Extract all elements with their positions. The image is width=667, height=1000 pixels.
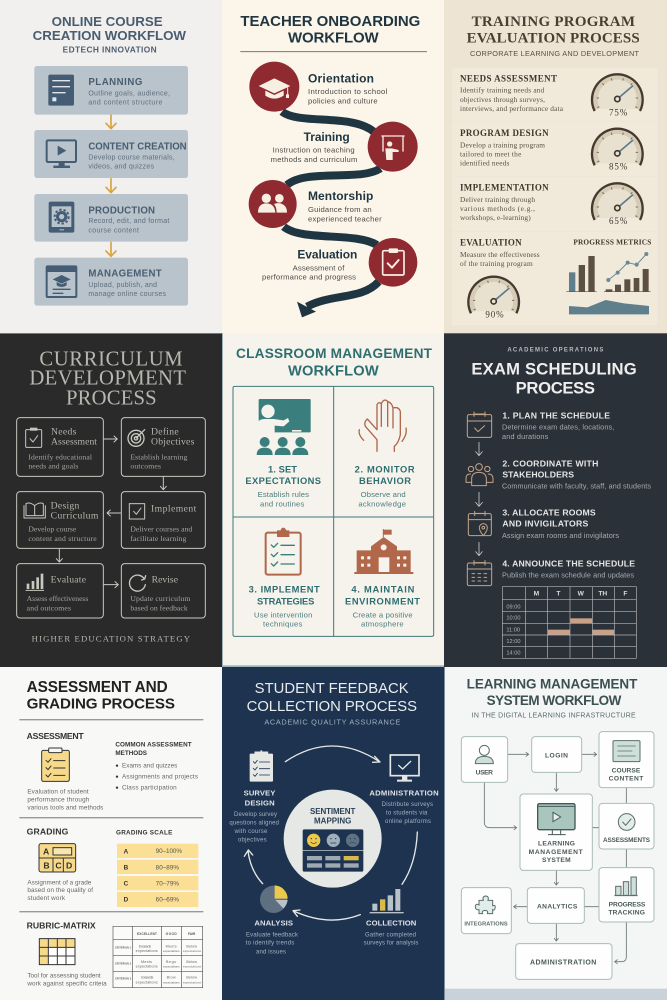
row: evaluation: [452, 232, 657, 325]
common assessment methods: METHODS: [115, 750, 147, 757]
box: design curriculum: Design: [51, 500, 80, 511]
title: training program evaluation process: [467, 14, 640, 46]
rubric table: CRITERION 3: [115, 979, 132, 981]
step: survey design: DESIGN: [245, 799, 275, 808]
step: training: Instruction on teaching: [273, 146, 355, 155]
step: analysis: to identify trends: [246, 941, 294, 947]
title: teacher onboarding workflow: WORKFLOW: [288, 30, 380, 47]
box: evaluate: [17, 564, 103, 618]
step: collection: Gather completed: [365, 932, 416, 938]
section: grading: GRADING: [27, 827, 69, 837]
section: grading: D: [66, 860, 72, 870]
rubric table: CRITERION 1: [115, 947, 132, 949]
quadrant: implement strategies: techniques: [263, 620, 303, 629]
step: planning: Outline goals, audience,: [88, 90, 170, 97]
quadrant: monitor behavior: BEHAVIOR: [359, 476, 411, 486]
exam timetable: T: [556, 591, 560, 598]
rubric table: expectations: [163, 965, 180, 969]
title: training program evaluation process: EVALUATION PROCESS: [467, 30, 640, 46]
step: planning: [34, 66, 188, 115]
step: orientation: [249, 62, 388, 112]
node: learning management system: LEARNING: [538, 841, 575, 848]
box: define objectives: Establish learning: [130, 453, 188, 462]
title: student feedback collection process: [247, 681, 417, 715]
step: content creation: CONTENT CREATION: [88, 141, 187, 152]
footer label: HIGHER EDUCATION STRATEGY: [32, 634, 191, 644]
step: survey design: Develop survey: [234, 812, 277, 818]
rubric table: Blow: [167, 976, 176, 980]
step: evaluation: [262, 238, 417, 287]
step: orientation: Orientation: [308, 72, 374, 86]
step: administration: ADMINISTRATION: [369, 789, 439, 798]
step: planning: PLANNING: [88, 77, 142, 88]
arrow: [476, 542, 482, 556]
rubric table: Meets: [141, 960, 152, 964]
box: revise: Revise: [152, 575, 178, 586]
step: management: Upload, publish, and: [88, 282, 157, 289]
title: student feedback collection process: COLLECTION PROCESS: [247, 699, 417, 715]
rubric table: Meets: [166, 944, 177, 948]
row: program design: identified needs: [460, 159, 509, 168]
step 4: announce the schedule: Publish the exam schedule and updates: [502, 571, 634, 580]
box: needs assessment: needs and goals: [28, 462, 78, 471]
title: exam scheduling process: [471, 360, 637, 397]
section: grading: [27, 827, 93, 902]
rubric table: expectations: [136, 965, 158, 969]
row: needs assessment: 75%: [609, 108, 628, 118]
box: define objectives: Define: [151, 426, 179, 437]
quadrant: monitor behavior: 2. MONITOR: [355, 464, 415, 474]
rubric table: expectations: [183, 949, 201, 953]
box: implement: Deliver courses and: [130, 524, 193, 533]
quadrant: implement strategies: STRATEGIES: [257, 596, 314, 606]
section: assessment: ASSESSMENT: [27, 731, 84, 741]
node: course content: [599, 732, 654, 788]
title: classroom management workflow: CLASSROOM MANAGEMENT: [236, 346, 433, 361]
step: training: Training: [304, 130, 350, 144]
step: management: [34, 258, 188, 306]
box: evaluate: Assess effectiveness: [27, 594, 88, 603]
step: mentorship: Guidance from an: [308, 205, 372, 214]
section: rubric matrix: RUBRIC-MATRIX: [27, 920, 96, 930]
row: needs assessment: Identify training needs and: [460, 86, 545, 95]
common assessment methods: Assignments and projects: [122, 774, 198, 781]
box: revise: [121, 564, 205, 618]
step: survey design: questions aligned: [229, 821, 279, 827]
step: administration: Distribute surveys: [382, 802, 433, 808]
node: course content: CONTENT: [609, 776, 643, 783]
step: mentorship: Mentorship: [308, 189, 373, 203]
step: training: methods and curriculum: [271, 155, 357, 164]
node: progress tracking: [599, 868, 654, 922]
quadrant: implement strategies: [249, 528, 320, 629]
common assessment methods: Class participation: [122, 785, 177, 792]
step: production: course content: [88, 227, 139, 234]
arrow: [476, 442, 482, 456]
quadrant: maintain environment: [345, 529, 420, 629]
step 3: allocate rooms and invigilators: 3. ALLOCATE ROOMS: [502, 508, 596, 518]
grading scale: 90–100%: [156, 848, 182, 855]
row: program design: tailored to meet the: [460, 150, 521, 159]
step: survey design: with course: [234, 829, 268, 835]
exam timetable: W: [578, 591, 585, 598]
title: training program evaluation process: TRAINING PROGRAM: [472, 14, 635, 30]
grading scale: A: [124, 848, 129, 855]
row: implementation: [452, 177, 657, 231]
step: evaluation: Evaluation: [297, 248, 357, 262]
row: implementation: Deliver training through: [460, 195, 535, 204]
rubric table: EXCELLENT: [137, 932, 157, 936]
title: curriculum development process: DEVELOPMENT: [29, 368, 186, 390]
section: assessment: various tools and methods: [27, 805, 103, 812]
step 1: plan the schedule: [467, 410, 614, 441]
panel: training program evaluation process: [444, 0, 667, 333]
exam timetable: 14:00: [506, 650, 520, 656]
title: curriculum development process: PROCESS: [66, 388, 157, 410]
arrow: [104, 436, 117, 442]
arrow: [106, 179, 116, 193]
rubric table: Exceeds: [141, 976, 154, 980]
step: collection: surveys for analysis: [364, 941, 418, 947]
step: collection: [364, 889, 418, 947]
row: implementation: IMPLEMENTATION: [460, 183, 549, 193]
node: administration: ADMINISTRATION: [530, 959, 596, 966]
step: mentorship: experienced teacher: [308, 214, 382, 223]
grading scale: GRADING SCALE: [116, 829, 172, 836]
box: revise: Update curriculum: [130, 594, 190, 603]
exam timetable: 11:00: [506, 627, 520, 633]
node: user: [461, 737, 508, 782]
rubric table: expectations: [163, 980, 180, 984]
sentiment mapping hub: SENTIMENT: [310, 807, 355, 816]
chart: progress metrics: [566, 237, 651, 314]
row: implementation: workshops, e-learning): [460, 213, 531, 222]
section: grading: A: [43, 847, 50, 857]
step: production: Record, edit, and format: [88, 218, 169, 225]
sentiment mapping hub: MAPPING: [314, 817, 351, 826]
step 2: coordinate with stakeholders: [466, 458, 651, 490]
step: survey design: SURVEY: [244, 789, 275, 798]
grading scale: C: [124, 881, 129, 888]
node: integrations: [461, 888, 511, 934]
exam timetable: M: [534, 591, 540, 598]
rubric table: FAIR: [188, 932, 196, 936]
box: evaluate: and outcomes: [27, 604, 71, 613]
node: login: [532, 737, 582, 772]
rubric table: expectations: [136, 949, 158, 953]
title: exam scheduling process: EXAM SCHEDULING: [471, 360, 637, 379]
title: assessment and grading process: [27, 679, 175, 712]
step: mentorship: [249, 180, 382, 228]
title: student feedback collection process: STUDENT FEEDBACK: [255, 681, 409, 697]
arrow: [106, 115, 116, 129]
arrow: [107, 510, 121, 516]
step: content creation: [34, 130, 188, 178]
box: define objectives: outcomes: [130, 462, 161, 471]
title: teacher onboarding workflow: [240, 13, 420, 47]
box: evaluate: Evaluate: [51, 575, 86, 586]
step: planning: and content structure: [88, 100, 162, 107]
node: analytics: [527, 888, 584, 923]
step 4: announce the schedule: 4. ANNOUNCE THE SCHEDULE: [502, 558, 635, 568]
title: learning management system workflow: LEARNING MANAGEMENT: [467, 677, 638, 692]
section: grading: student work: [27, 895, 66, 902]
node: progress tracking: PROGRESS: [609, 902, 646, 909]
title: exam scheduling process: PROCESS: [516, 378, 595, 397]
rubric table: expectations: [183, 980, 201, 984]
step: analysis: ANALYSIS: [254, 919, 293, 928]
sentiment mapping hub: [284, 790, 382, 888]
step: analysis: and issues: [256, 949, 286, 955]
step 3: allocate rooms and invigilators: AND INVIGILATORS: [502, 519, 589, 529]
rubric table: expectations: [183, 965, 201, 969]
title: online course creation workflow: ONLINE COURSE: [52, 14, 163, 29]
step: administration: to students via: [386, 811, 428, 817]
rubric table: [113, 926, 203, 988]
rubric table: Below: [186, 976, 197, 980]
row: program design: PROGRAM DESIGN: [460, 128, 549, 138]
node: user: USER: [476, 770, 493, 777]
row: program design: [452, 122, 657, 176]
box: design curriculum: Curriculum: [51, 510, 99, 521]
node: learning management system: MANAGEMENT: [529, 849, 583, 856]
quadrant: maintain environment: atmosphere: [361, 620, 404, 629]
exam timetable: 10:00: [506, 616, 520, 622]
node: administration: [516, 944, 612, 979]
quadrant: maintain environment: Create a positive: [353, 610, 413, 619]
panel: exam scheduling process: [444, 333, 667, 667]
panel: classroom management workflow: [222, 333, 444, 667]
quadrant: monitor behavior: Observe and: [361, 490, 406, 499]
quadrant: monitor behavior: [355, 400, 415, 508]
rubric table: Exceeds: [139, 944, 151, 948]
rubric table: Begs: [166, 960, 176, 964]
box: needs assessment: Assessment: [51, 437, 97, 448]
panel: teacher onboarding workflow: [222, 0, 444, 333]
section: assessment: [27, 731, 103, 812]
exam timetable: F: [623, 591, 627, 598]
row: needs assessment: objectives through surveys,: [460, 95, 545, 104]
exam timetable: TH: [598, 591, 607, 598]
step: analysis: [246, 885, 298, 955]
quadrant: maintain environment: 4. MAINTAIN: [351, 585, 415, 595]
chart: progress metrics: PROGRESS METRICS: [573, 237, 651, 246]
step 1: plan the schedule: Determine exam dates, locations,: [502, 423, 614, 432]
title: classroom management workflow: [236, 346, 433, 379]
subtitle: ACADEMIC QUALITY ASSURANCE: [264, 718, 400, 727]
rubric table: GOOD: [166, 932, 177, 936]
arrow: [56, 549, 62, 562]
step: evaluation: performance and progress: [262, 273, 356, 282]
common assessment methods: [115, 742, 198, 792]
box: design curriculum: content and structure: [28, 534, 97, 543]
step: survey design: objectives: [238, 837, 267, 843]
step: administration: online platforms: [385, 819, 431, 825]
title: curriculum development process: CURRICULUM: [39, 348, 183, 370]
exam timetable: [502, 587, 636, 658]
eyebrow: ACADEMIC OPERATIONS: [507, 348, 603, 354]
common assessment methods: COMMON ASSESSMENT: [115, 742, 192, 749]
title: teacher onboarding workflow: TEACHER ONBOARDING: [240, 13, 420, 30]
step: management: manage online courses: [88, 291, 166, 298]
grading scale: [116, 829, 198, 907]
step: evaluation: Assessment of: [293, 263, 345, 272]
cycle arrows: [244, 746, 417, 920]
arrow: [476, 492, 482, 506]
box: define objectives: [121, 418, 205, 476]
section: assessment: Evaluation of student: [27, 788, 89, 795]
row: evaluation: 90%: [485, 309, 504, 319]
step: production: [34, 194, 188, 242]
step: collection: COLLECTION: [366, 919, 417, 928]
section: assessment: performance through: [27, 797, 90, 804]
row: needs assessment: NEEDS ASSESSMENT: [460, 73, 557, 83]
quadrant: implement strategies: Use intervention: [254, 610, 312, 619]
row: implementation: 65%: [609, 216, 628, 226]
panel: student feedback collection process: [222, 667, 444, 1000]
quadrant: set expectations: and routines: [260, 499, 305, 508]
step: survey design: [229, 750, 279, 843]
section: grading: B: [43, 860, 50, 870]
box: define objectives: Objectives: [151, 437, 195, 448]
row: evaluation: Measure the effectiveness: [460, 250, 540, 259]
node: analytics: ANALYTICS: [537, 904, 578, 911]
title: learning management system workflow: [467, 677, 638, 708]
quadrant: set expectations: 1. SET: [268, 464, 297, 474]
grading scale: D: [124, 897, 129, 904]
rubric table: CRITERION 2: [115, 963, 132, 965]
box: implement: Implement: [151, 503, 197, 514]
node: assessments: ASSESSMENTS: [603, 837, 650, 844]
row: evaluation: of the training program: [460, 259, 533, 268]
quadrant frame: [233, 386, 434, 636]
box: needs assessment: [17, 418, 103, 476]
node: assessments: [599, 803, 654, 849]
common assessment methods: Exams and quizzes: [122, 763, 177, 770]
box: needs assessment: Needs: [51, 426, 77, 437]
step: content creation: videos, and quizzes: [88, 164, 154, 171]
grading scale: B: [124, 864, 129, 871]
node: progress tracking: TRACKING: [608, 910, 645, 917]
quadrant: implement strategies: 3. IMPLEMENT: [249, 585, 320, 595]
step 3: allocate rooms and invigilators: [468, 508, 619, 540]
grading scale: 60–69%: [156, 897, 179, 904]
section: grading: Assignment of a grade: [27, 879, 92, 886]
arrow: [160, 477, 166, 490]
node: learning management system: [520, 794, 592, 870]
box: design curriculum: Develop course: [28, 525, 77, 534]
step: administration: [369, 755, 439, 825]
exam timetable: 09:00: [506, 604, 520, 610]
quadrant: monitor behavior: acknowledge: [358, 499, 406, 508]
step: management: MANAGEMENT: [88, 269, 162, 280]
arrow: [104, 582, 118, 588]
step: production: PRODUCTION: [88, 205, 155, 216]
subtitle: CORPORATE LEARNING AND DEVELOPMENT: [470, 49, 640, 58]
title: online course creation workflow: [33, 14, 186, 43]
section: rubric matrix: work against specific criteia: [26, 980, 107, 987]
title: curriculum development process: [29, 348, 186, 410]
grading scale: 80–89%: [156, 864, 179, 871]
arrow: [106, 242, 116, 256]
quadrant: maintain environment: ENVIRONMENT: [345, 596, 420, 606]
step 2: coordinate with stakeholders: 2. COORDINATE WITH: [502, 458, 598, 468]
step 4: announce the schedule: [467, 558, 635, 586]
node: course content: COURSE: [612, 767, 641, 774]
step 1: plan the schedule: and durations: [502, 432, 549, 441]
box: revise: based on feedback: [130, 603, 188, 612]
node: learning management system: SYSTEM: [542, 857, 571, 864]
rubric table: Below: [186, 960, 197, 964]
quadrant: set expectations: [245, 399, 321, 508]
exam timetable: 12:00: [506, 639, 520, 645]
row: program design: 85%: [609, 162, 628, 172]
rubric table: expectations: [163, 949, 180, 953]
grading scale: 70–79%: [156, 881, 179, 888]
box: needs assessment: Identify educational: [28, 452, 92, 461]
title: assessment and grading process: GRADING PROCESS: [27, 695, 175, 712]
box: design curriculum: [17, 492, 103, 548]
section: rubric matrix: Tool for assessing student: [27, 973, 101, 980]
panel: online course creation workflow: [0, 0, 222, 333]
title: online course creation workflow: CREATION WORKFLOW: [33, 28, 186, 43]
step 3: allocate rooms and invigilators: Assign exam rooms and invigilators: [502, 531, 619, 540]
title: learning management system workflow: SYSTEM WORKFLOW: [487, 693, 622, 708]
box: implement: facilitate learning: [130, 534, 187, 543]
winding path with arrow: [282, 112, 380, 317]
row: program design: Develop a training program: [460, 140, 545, 149]
subtitle: IN THE DIGITAL LEARNING INFRASTRUCTURE: [472, 713, 636, 720]
node: integrations: INTEGRATIONS: [464, 922, 508, 928]
panel: assessment and grading process: [0, 667, 222, 1000]
step 2: coordinate with stakeholders: Communicate with faculty, staff, and students: [502, 482, 651, 490]
row: needs assessment: [452, 68, 657, 121]
title: assessment and grading process: ASSESSMENT AND: [27, 679, 168, 696]
title: classroom management workflow: WORKFLOW: [288, 363, 379, 379]
step: orientation: policies and culture: [308, 96, 378, 105]
step: analysis: Evaluate feedback: [246, 932, 298, 938]
step 2: coordinate with stakeholders: STAKEHOLDERS: [502, 469, 574, 479]
rubric table: Below: [186, 944, 197, 948]
subtitle: EDTECH INNOVATION: [63, 45, 157, 55]
row: needs assessment: interviews, and performance data: [460, 104, 564, 113]
quadrant: set expectations: Establish rules: [258, 490, 309, 499]
section: rubric matrix: [26, 920, 107, 987]
step: training: [271, 122, 418, 172]
row: evaluation: EVALUATION: [460, 237, 522, 247]
panel: learning management system workflow: [444, 667, 667, 1000]
step: orientation: Introduction to school: [308, 87, 388, 96]
section: grading: C: [55, 860, 62, 870]
quadrant: set expectations: EXPECTATIONS: [245, 476, 321, 486]
section: grading: based on the quality of: [27, 887, 93, 894]
panel: curriculum development process: [0, 333, 222, 667]
step: content creation: Develop course materials,: [88, 154, 175, 161]
connectors: [484, 752, 626, 964]
rubric table: expectations: [136, 980, 158, 984]
node: login: LOGIN: [545, 752, 568, 759]
step 1: plan the schedule: 1. PLAN THE SCHEDULE: [502, 410, 610, 420]
box: implement: [121, 492, 205, 548]
row: implementation: various methods (e.g.,: [460, 204, 535, 213]
